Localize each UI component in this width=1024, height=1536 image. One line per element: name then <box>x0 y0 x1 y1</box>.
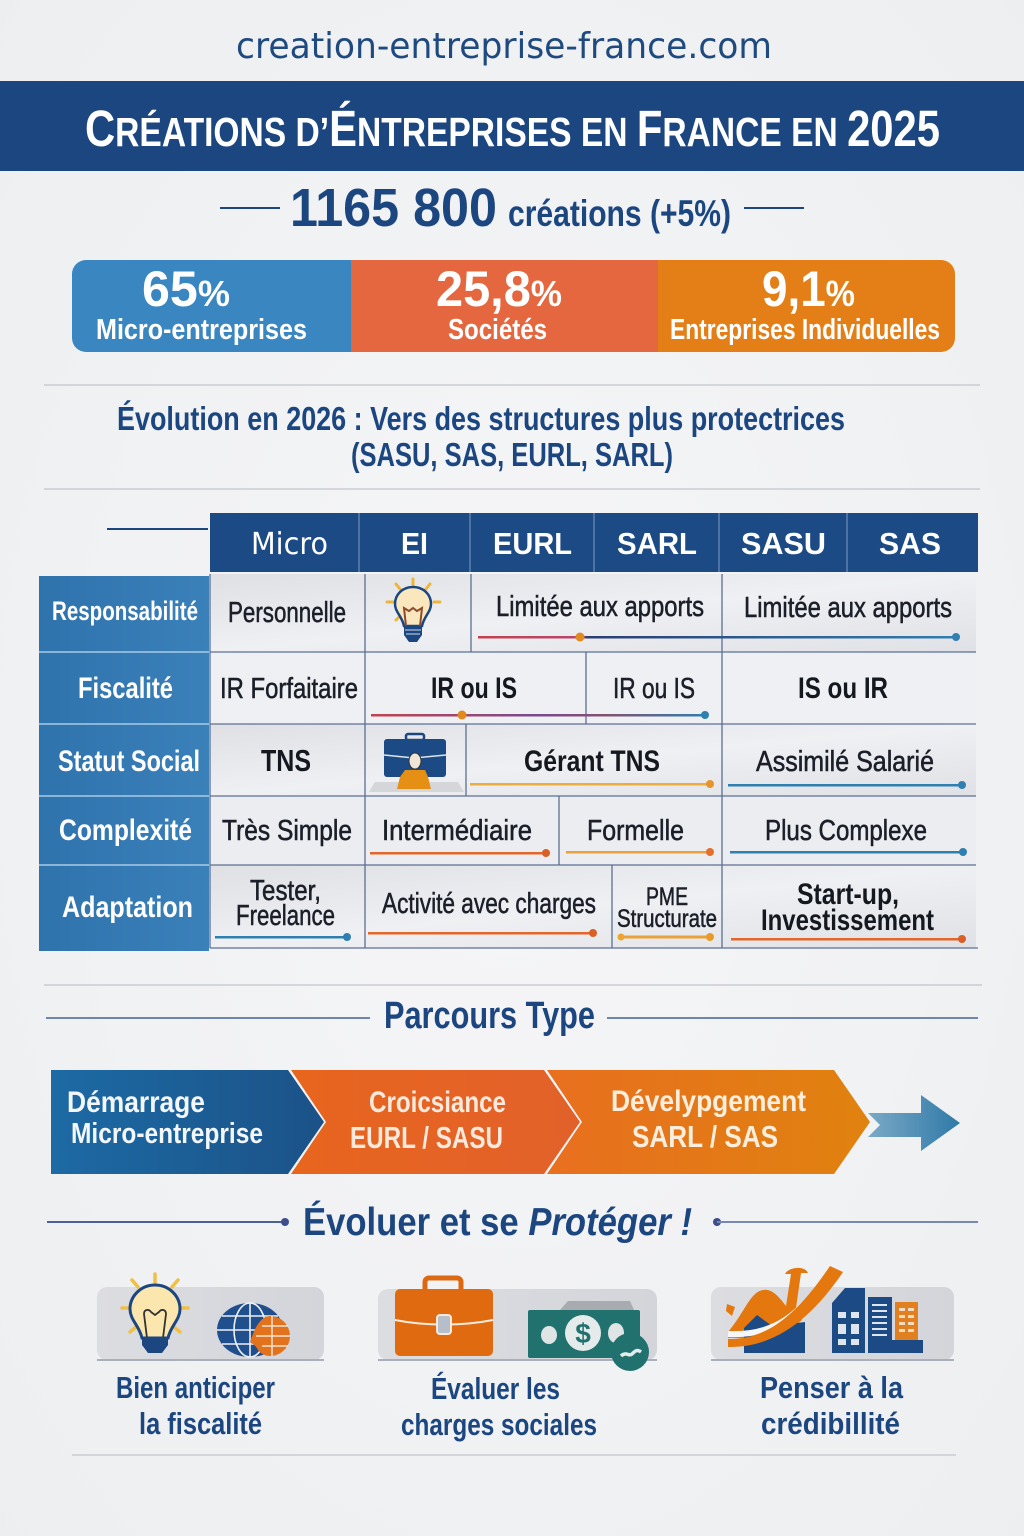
tip: charges sociales <box>378 1278 657 1442</box>
table header row: EI <box>401 526 428 561</box>
stat: societes <box>436 261 562 346</box>
title banner <box>0 81 1024 171</box>
total creations headline: créations (+5%) <box>508 193 731 234</box>
row label column: Fiscalité <box>78 672 173 705</box>
progress line: assimile <box>728 781 966 789</box>
icon: lightbulb <box>387 579 440 642</box>
table grid <box>210 574 978 948</box>
stat: micro: Micro-entreprises <box>96 314 307 346</box>
icon panel: briefcase and money: $ <box>575 1318 591 1349</box>
site url: creation-entreprise-france.com <box>236 26 772 67</box>
comparison table <box>39 513 978 951</box>
row: fiscalite: IR ou IS <box>613 673 695 705</box>
progress line: formelle <box>566 848 714 856</box>
journey chevrons <box>51 1070 960 1174</box>
tip label <box>401 1371 597 1442</box>
progress line: responsabilite <box>478 632 960 642</box>
stat: micro <box>96 261 307 346</box>
progress line: fiscalite <box>371 710 709 720</box>
icon panel: bulb and globe <box>97 1274 324 1361</box>
tagline <box>47 1200 978 1244</box>
row: responsabilite: Limitée aux apports <box>496 591 704 623</box>
stat: micro: 65% <box>142 261 230 317</box>
table header row: SAS <box>879 526 941 561</box>
row: fiscalite: IR Forfaitaire <box>220 673 358 705</box>
tip label <box>116 1370 275 1441</box>
step: developpement: SARL / SAS <box>632 1119 778 1154</box>
progress line: gerant <box>470 780 714 788</box>
row label column: Responsabilité <box>52 596 198 626</box>
stat: societes: Sociétés <box>448 314 547 346</box>
step: demarrage: Micro-entreprise <box>71 1118 263 1150</box>
row: adaptation: Structurate <box>617 905 717 933</box>
table header row <box>210 513 978 572</box>
row: fiscalite: IS ou IR <box>798 672 888 705</box>
step: croissance: Croicsiance <box>369 1086 506 1119</box>
tip label: crédibillité <box>761 1406 900 1441</box>
row: adaptation: Start-up, <box>797 878 899 911</box>
table header row: SASU <box>741 526 826 561</box>
row: adaptation: Freelance <box>236 900 335 932</box>
row: statut social: Gérant TNS <box>524 745 660 778</box>
progress line: plus complexe <box>730 848 967 856</box>
progress line: start-up <box>731 935 966 943</box>
section heading: parcours type: Parcours Type <box>384 995 595 1037</box>
row label column: Complexité <box>59 814 192 847</box>
stat: entreprises individuelles: Entreprises Individuelles <box>670 314 940 346</box>
row: fiscalite <box>220 672 888 720</box>
tip: fiscalite <box>97 1274 324 1441</box>
step: developpement: Dévelypgement <box>611 1085 806 1118</box>
row: statut social: TNS <box>261 743 311 778</box>
step: croissance <box>291 1070 580 1174</box>
step: demarrage: Démarrage <box>67 1086 205 1119</box>
step: demarrage <box>51 1070 324 1174</box>
tip label <box>760 1370 904 1441</box>
row: complexite: Plus Complexe <box>765 815 927 847</box>
row: fiscalite: IR ou IS <box>431 672 517 705</box>
tip label: Penser à la <box>760 1370 904 1405</box>
tip label: charges sociales <box>401 1407 597 1442</box>
arrow <box>868 1095 960 1151</box>
row: statut social <box>261 734 966 792</box>
row: adaptation <box>215 875 966 943</box>
row: responsabilite <box>228 579 960 642</box>
title: CRÉATIONS D’ÉNTREPRISES EN FRANCE EN 2025 <box>85 100 940 157</box>
row: adaptation: Investissement <box>761 904 934 937</box>
row label column <box>39 576 209 951</box>
row label column: Statut Social <box>58 745 200 778</box>
stat: entreprises individuelles <box>670 261 940 346</box>
tip label: Bien anticiper <box>116 1370 275 1405</box>
icon panel: growth and buildings <box>711 1266 954 1361</box>
table header row: EURL <box>493 526 572 561</box>
row: adaptation: Tester, <box>250 875 321 907</box>
progress line: activite <box>368 929 597 937</box>
table header row: Micro <box>251 527 328 562</box>
row label column: Adaptation <box>62 891 193 924</box>
tip label: Évaluer les <box>431 1371 560 1406</box>
total creations headline <box>220 178 804 238</box>
tagline: Évoluer et se Protéger ! <box>303 1200 692 1244</box>
section heading: evolution 2026: Évolution en 2026 : Vers des structures plus protectrices <box>117 400 845 437</box>
progress line: pme <box>618 933 714 941</box>
row: responsabilite: Personnelle <box>228 597 346 629</box>
stat bar <box>72 260 955 352</box>
stat: societes: 25,8% <box>436 261 562 317</box>
section heading: evolution 2026: (SASU, SAS, EURL, SARL) <box>351 436 673 473</box>
progress line: freelance <box>215 933 351 941</box>
tip: credibilite <box>711 1266 954 1441</box>
row: responsabilite: Limitée aux apports <box>744 592 952 624</box>
stat: entreprises individuelles: 9,1% <box>762 261 855 317</box>
table body background <box>210 574 976 948</box>
row: statut social: Assimilé Salarié <box>756 746 934 778</box>
row: adaptation: Activité avec charges <box>382 888 596 920</box>
icon panel: briefcase and money <box>378 1278 657 1371</box>
table header row: SARL <box>617 526 697 561</box>
section heading: evolution 2026 <box>117 400 845 473</box>
row: adaptation: PME <box>646 883 688 911</box>
tip label: la fiscalité <box>139 1406 262 1441</box>
row: complexite: Très Simple <box>222 815 352 847</box>
row: complexite <box>222 815 967 857</box>
step: croissance: EURL / SASU <box>350 1120 503 1155</box>
row: complexite: Intermédiaire <box>382 815 532 847</box>
step: developpement <box>547 1070 870 1174</box>
icon: briefcase with person <box>369 734 464 792</box>
total creations headline: 1165 800 <box>290 178 497 238</box>
row: complexite: Formelle <box>587 815 684 847</box>
progress line: intermediaire <box>370 849 550 857</box>
